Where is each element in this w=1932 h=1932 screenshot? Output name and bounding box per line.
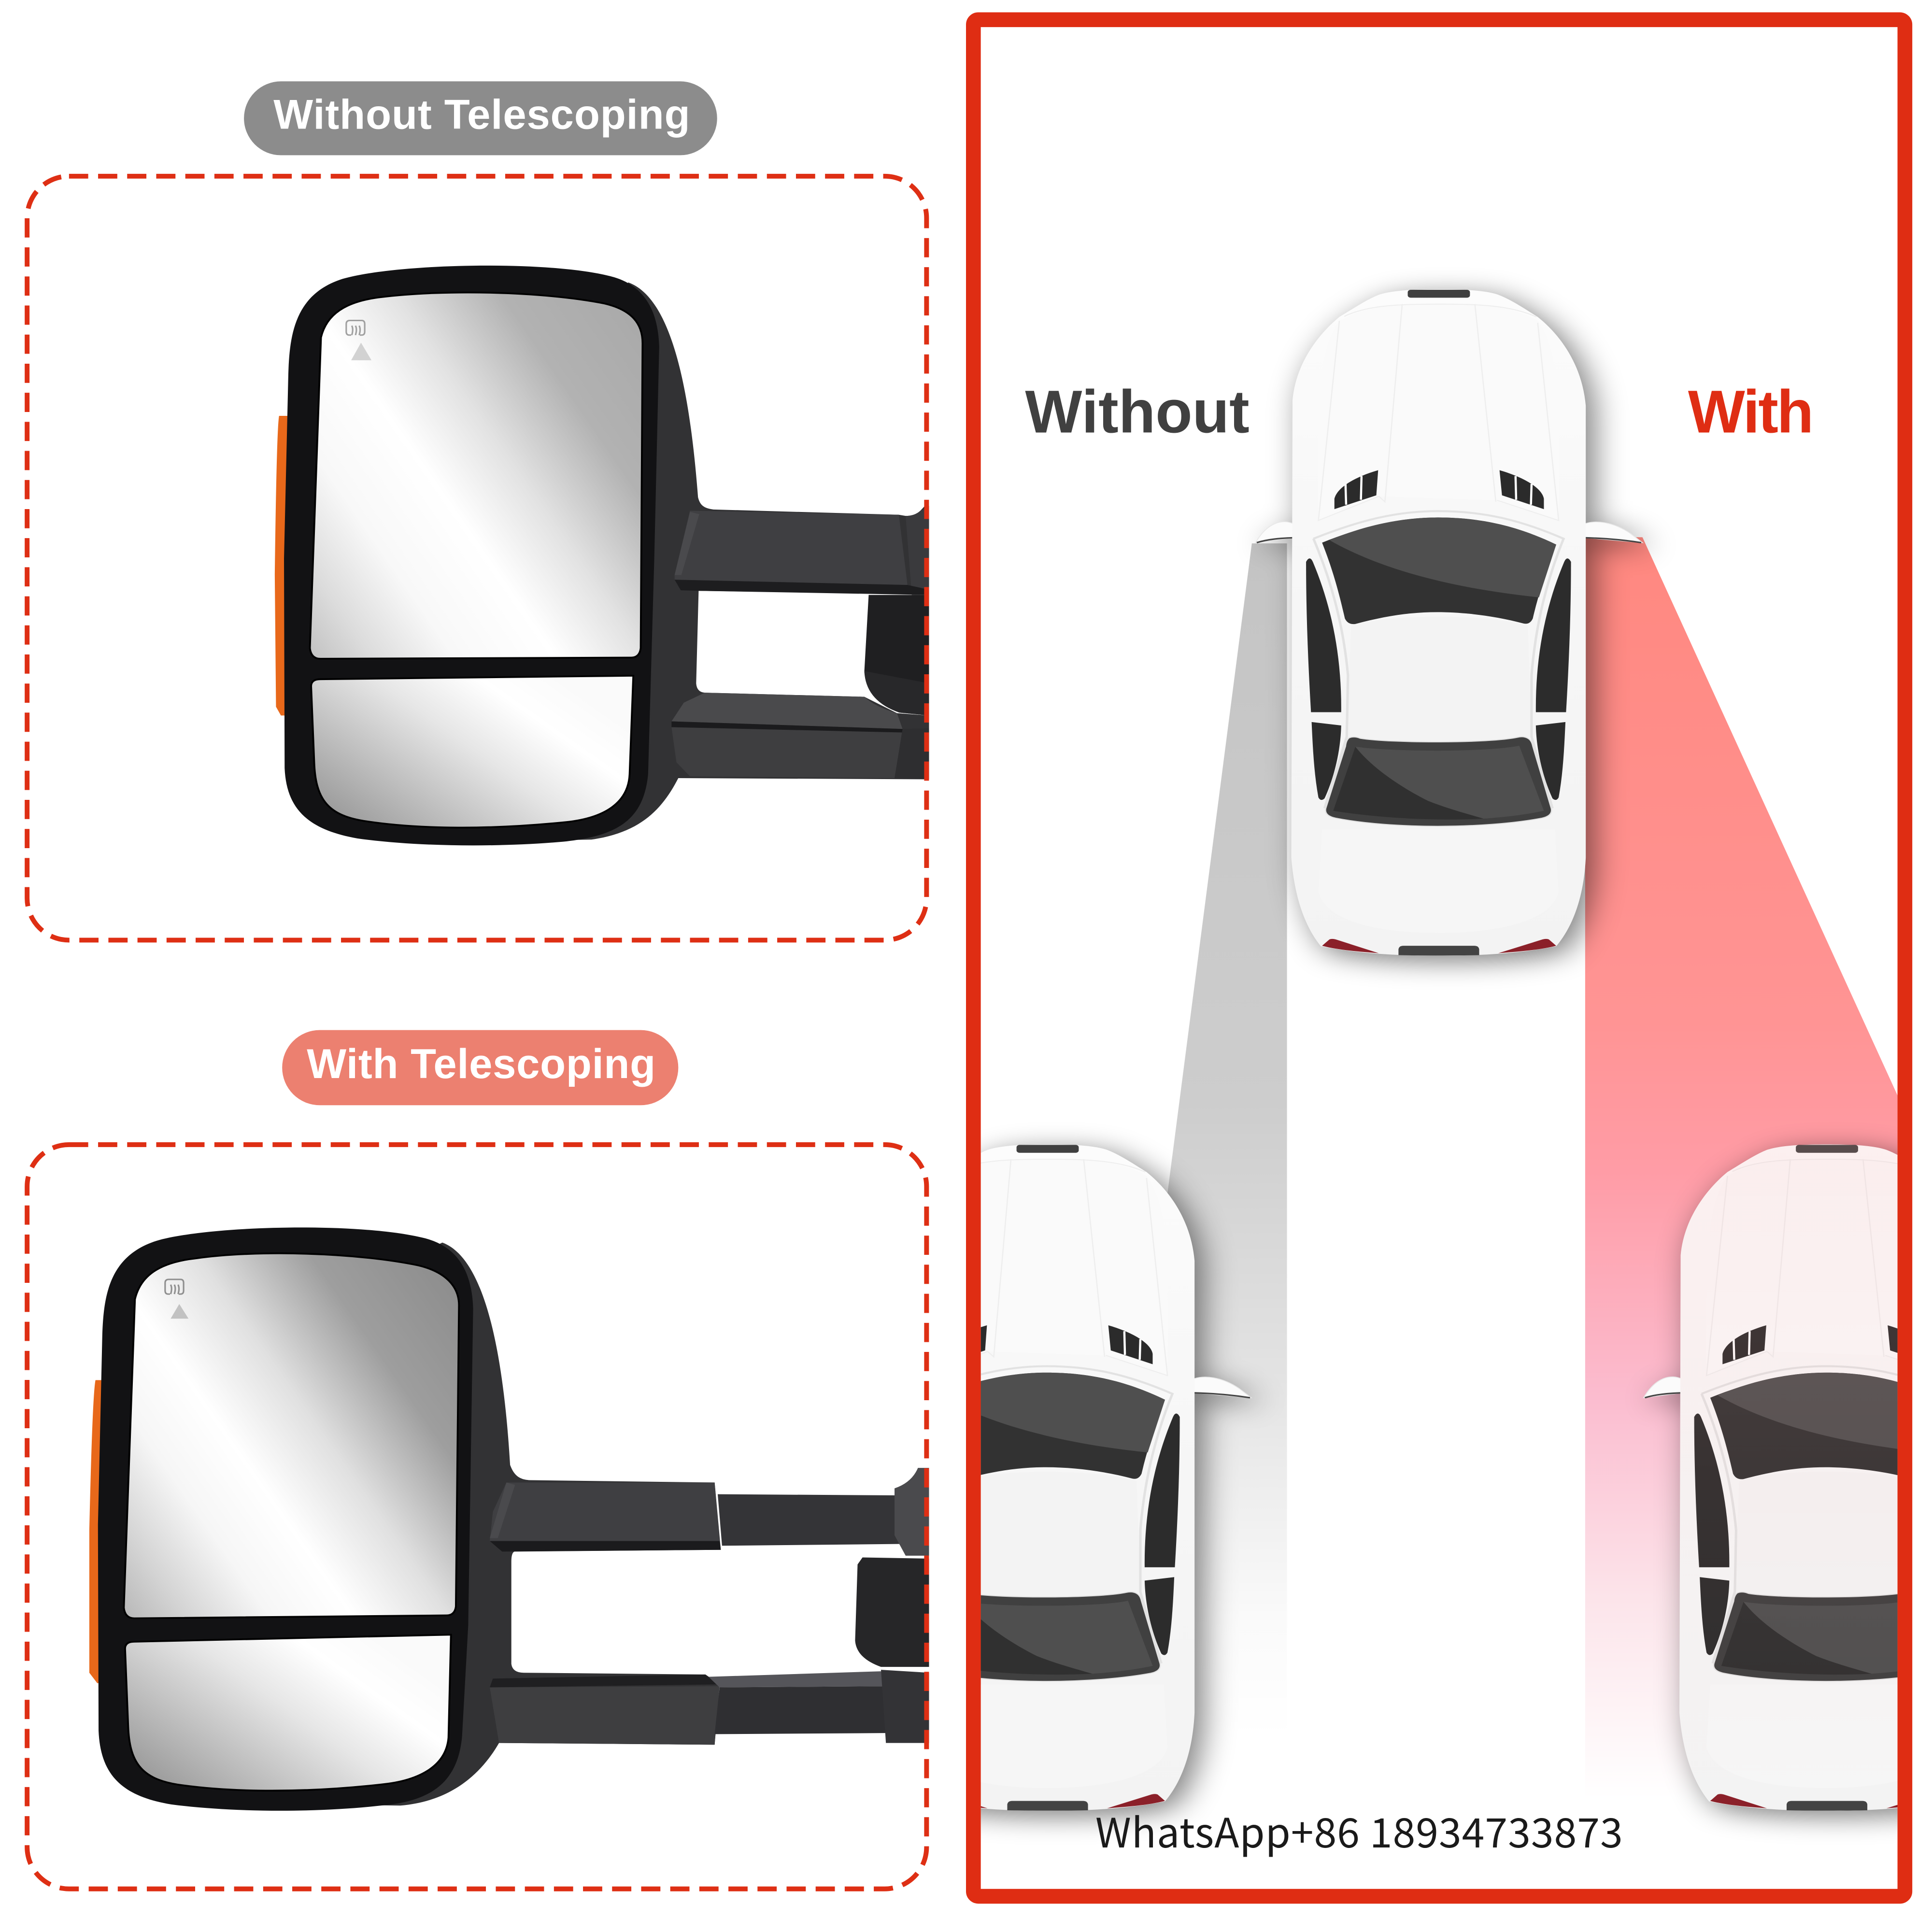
lower arm end section xyxy=(895,728,929,779)
panel: with telescoping xyxy=(27,1030,929,1889)
car: bottom right xyxy=(1644,1144,1932,1817)
pill heading: Without Telescoping: Without Telescoping xyxy=(273,91,690,138)
icon: defrost symbol xyxy=(346,320,365,335)
upper mirror glass xyxy=(124,1253,459,1619)
panel: blind spot comparison diagram xyxy=(865,20,1932,1896)
grey view cone: without telescoping xyxy=(1091,543,1287,1787)
car: bottom left xyxy=(865,1144,1260,1817)
extended lower tube side xyxy=(715,1686,890,1734)
elbow highlight xyxy=(490,1482,515,1538)
folding base cylinder xyxy=(855,1557,929,1667)
lower convex mirror glass xyxy=(311,676,633,827)
label: Without: Without xyxy=(1025,378,1250,445)
upper mirror glass xyxy=(310,293,642,659)
icon: blind spot triangle xyxy=(351,343,371,360)
upper arm underside line xyxy=(675,580,929,595)
upper sleeve underside line xyxy=(490,1541,721,1551)
scene clipped to the frame xyxy=(865,289,1932,1817)
red view cone: with telescoping xyxy=(1585,537,1898,1811)
cylinder lower band xyxy=(865,671,929,715)
dashed red border xyxy=(27,176,926,940)
upper arm end collar xyxy=(906,506,929,595)
orange turn signal strip xyxy=(275,416,295,715)
upper end cap xyxy=(895,1468,929,1556)
pill heading: Without Telescoping xyxy=(244,81,717,155)
mirror photo: retracted towing mirror xyxy=(275,266,929,845)
lower end cap xyxy=(881,1670,929,1743)
pill heading: With Telescoping xyxy=(282,1030,678,1105)
upper sleeve face xyxy=(490,1482,720,1541)
black mirror frame xyxy=(284,266,659,845)
lower arm edge line xyxy=(671,721,903,733)
lower convex mirror glass xyxy=(125,1634,451,1790)
mirror photo: extended towing mirror xyxy=(89,1227,929,1811)
black mirror frame xyxy=(98,1227,473,1811)
mirror housing and sleeves xyxy=(308,1243,721,1805)
lower arm side face xyxy=(671,727,903,778)
elbow highlight xyxy=(675,512,699,575)
pill heading: With Telescoping: With Telescoping xyxy=(307,1040,655,1087)
upper arm face xyxy=(675,511,908,585)
red frame xyxy=(973,20,1905,1896)
icon: blind spot triangle xyxy=(170,1304,188,1319)
lower sleeve side face xyxy=(490,1686,720,1745)
extended lower tube top xyxy=(709,1671,890,1687)
extended upper tube xyxy=(718,1494,899,1546)
contact text: WhatsApp+86 18934733873 xyxy=(1095,1801,1623,1860)
label: With: With xyxy=(1688,378,1814,445)
dashed red border xyxy=(27,1145,926,1889)
icon: defrost symbol xyxy=(165,1279,184,1294)
mirror housing and retracted arms xyxy=(577,282,929,840)
lower arm top face xyxy=(671,693,903,729)
orange turn signal strip xyxy=(89,1380,110,1683)
lower sleeve top line xyxy=(490,1675,720,1687)
panel: without telescoping xyxy=(27,81,929,940)
folding base cylinder xyxy=(865,595,929,715)
car: lead car centre xyxy=(1255,289,1651,962)
